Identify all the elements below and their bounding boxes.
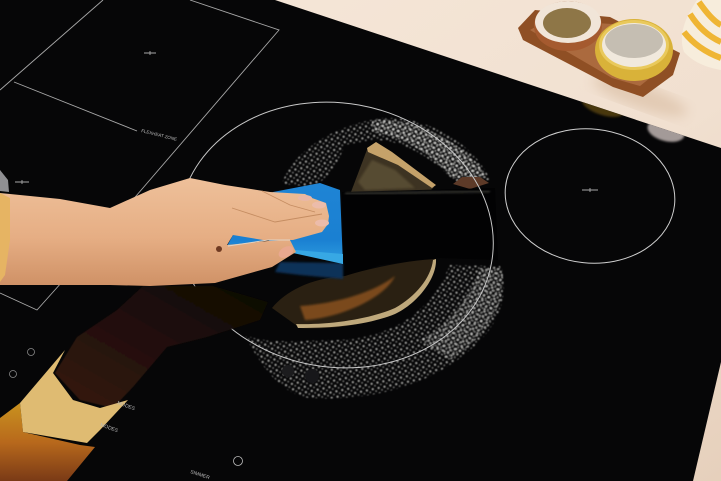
wiped clean band: [342, 188, 498, 278]
dark forearm and hand: [55, 286, 268, 408]
gray sleeve corner: [0, 170, 9, 192]
striped jar: [682, 0, 721, 70]
upper forearm and hand: [0, 178, 329, 286]
water droplets bottom: [245, 265, 504, 399]
cuff upper arm: [0, 193, 10, 282]
control labels: MODES: [116, 400, 136, 412]
wooden tray: [518, 10, 680, 97]
sleeve lower arm: [0, 403, 95, 481]
small bowl with seasoning: [534, 1, 602, 51]
yellow bowl with salt: [595, 19, 673, 81]
label: flexheat zone: FLEXHEAT ZONE: [141, 128, 177, 142]
sponge reflection: [275, 262, 343, 279]
flex zone outline lines: [0, 0, 598, 310]
tray interior: [530, 20, 665, 86]
right burner ring: [498, 120, 682, 272]
large burner ring: [157, 78, 515, 392]
lower grime crescent: [272, 259, 436, 328]
control labels: [99, 400, 211, 481]
control icons: [10, 348, 242, 466]
upper grime wedge: [351, 142, 489, 192]
control labels: SIMMER: [189, 469, 211, 481]
blue sponge: [227, 183, 343, 264]
tray shadow on counter: [589, 68, 691, 124]
water droplets top: [282, 118, 490, 186]
control labels: MODES: [99, 422, 119, 434]
reflections on cooktop edge: [581, 102, 686, 144]
cuff lower arm: [20, 350, 128, 443]
